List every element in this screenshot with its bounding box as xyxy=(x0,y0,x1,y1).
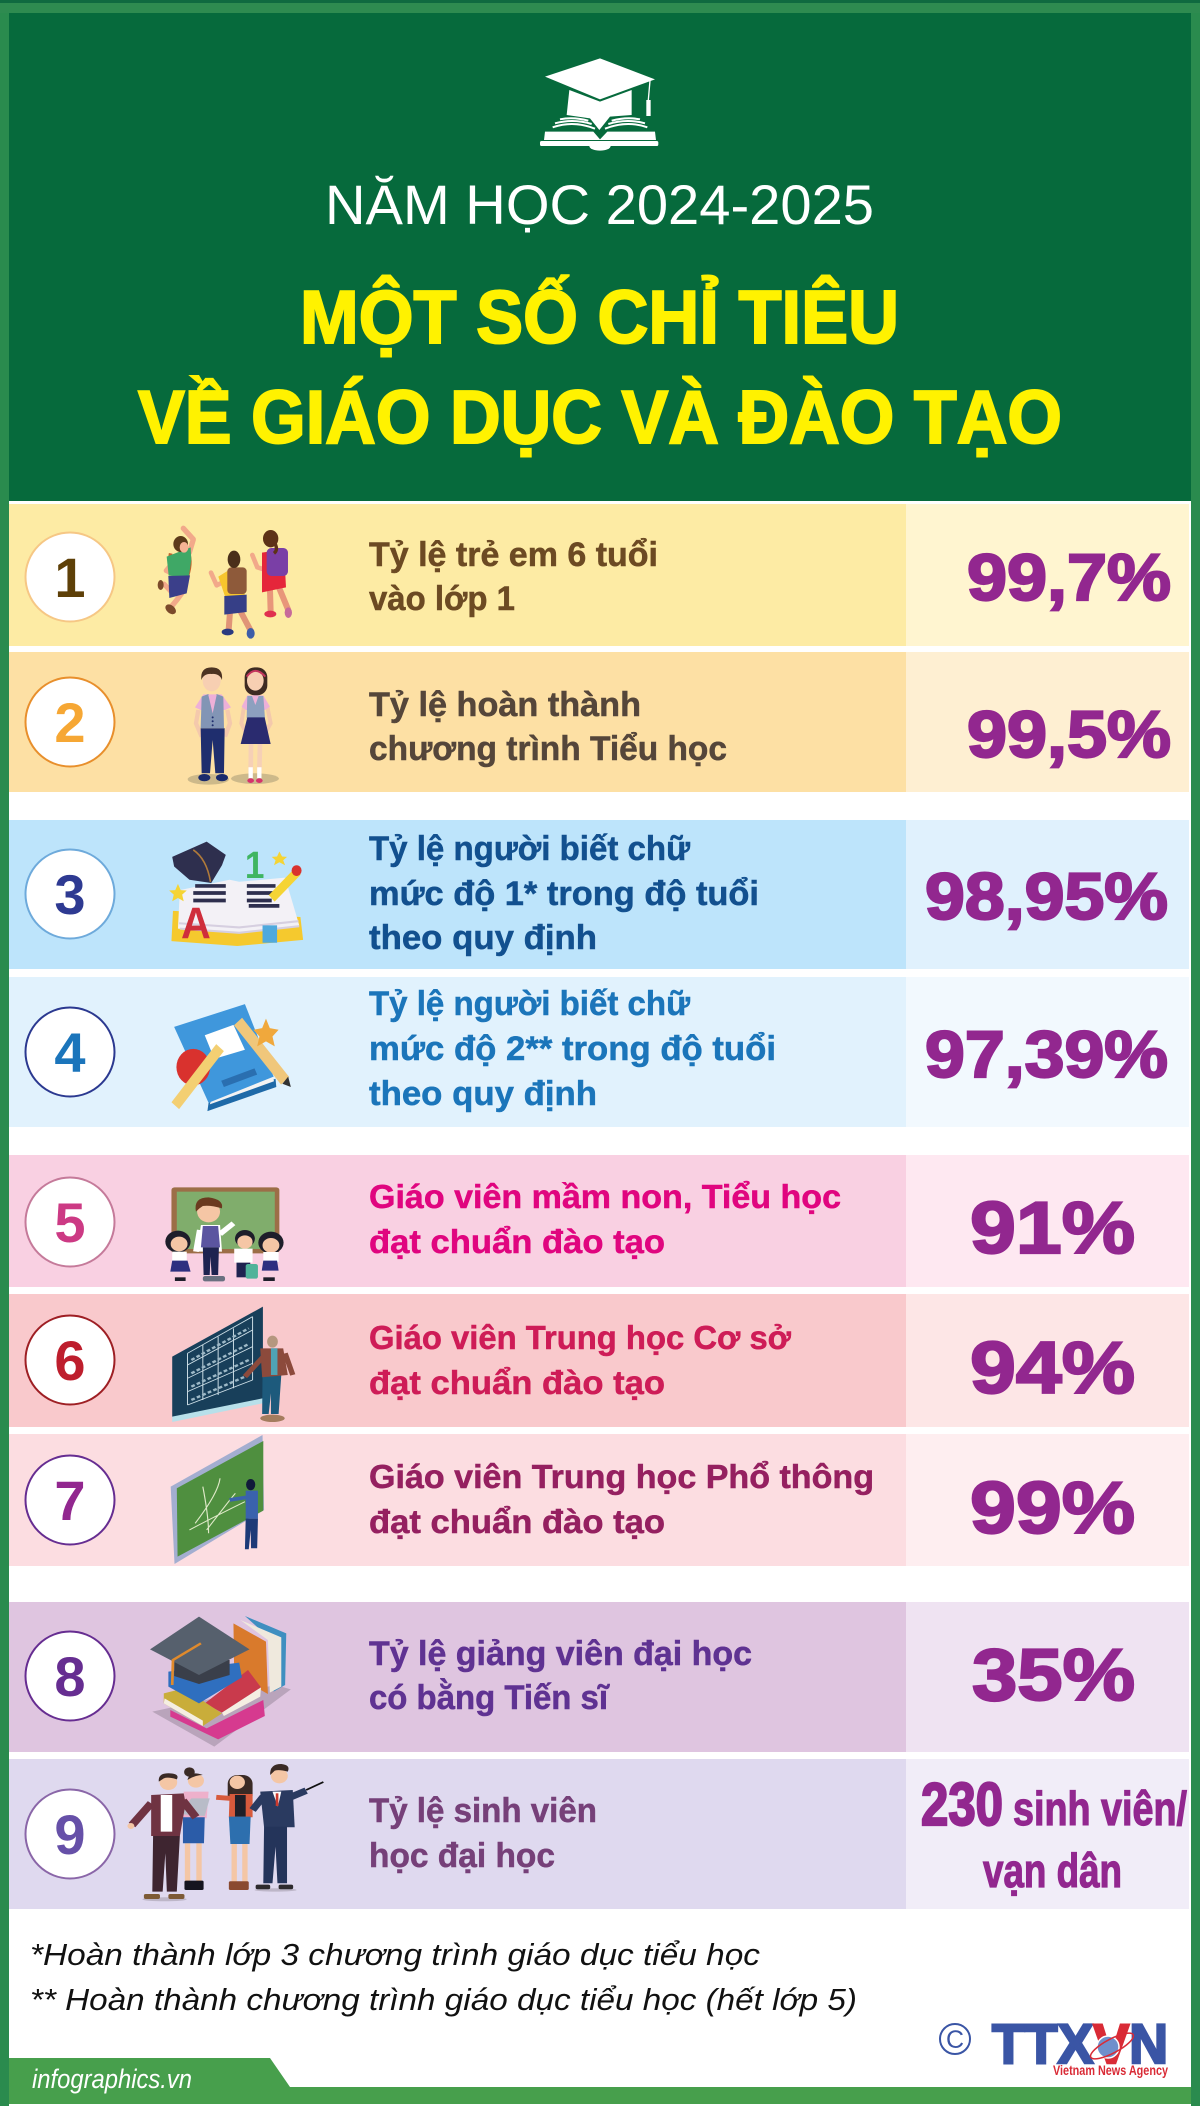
icon: group of four lecturers xyxy=(127,1764,323,1901)
label 9 xyxy=(369,1792,597,1875)
footer bar xyxy=(9,2058,1191,2104)
row 7 xyxy=(9,1434,1189,1566)
icon: teacher at dark formula board xyxy=(172,1307,293,1422)
row 9 xyxy=(9,1759,1189,1909)
value 6: 94% xyxy=(970,1328,1135,1409)
label 5: đạt chuẩn đào tạo xyxy=(369,1223,665,1260)
value 7: 99% xyxy=(970,1468,1135,1549)
label 1: vào lớp 1 xyxy=(369,580,515,618)
title xyxy=(138,275,1062,459)
label 3: mức độ 1* trong độ tuổi xyxy=(369,875,759,913)
value 9: vạn dân xyxy=(983,1844,1122,1897)
number 5 xyxy=(26,1178,114,1266)
copyright mark and TTXVN logo: Vietnam News Agency xyxy=(1053,2062,1168,2078)
row 8 xyxy=(9,1602,1189,1752)
label 7: Giáo viên Trung học Phổ thông xyxy=(369,1458,874,1495)
icon: open book with cap and pencil: 1 xyxy=(245,844,265,886)
label 2: Tỷ lệ hoàn thành xyxy=(369,686,641,724)
number 9 xyxy=(26,1790,114,1878)
label 3: theo quy định xyxy=(369,919,597,957)
row 5 xyxy=(9,1155,1189,1287)
value 3: 98,95% xyxy=(925,859,1168,933)
number 8 xyxy=(26,1632,114,1720)
number 2 xyxy=(26,678,114,766)
label 8: Tỷ lệ giảng viên đại học xyxy=(369,1635,752,1673)
row 3 xyxy=(9,820,1189,969)
icon: teacher at green board xyxy=(171,1435,264,1564)
label 4: mức độ 2** trong độ tuổi xyxy=(369,1030,776,1068)
label 8: có bằng Tiến sĩ xyxy=(369,1679,610,1717)
label 2 xyxy=(369,686,727,768)
value 1: 99,7% xyxy=(967,540,1171,614)
number 4: 4 xyxy=(54,1021,86,1084)
value 8: 35% xyxy=(972,1635,1135,1716)
number 3 xyxy=(26,850,114,938)
number 5: 5 xyxy=(54,1191,86,1254)
label 4 xyxy=(369,985,776,1113)
label 9: Tỷ lệ sinh viên xyxy=(369,1792,597,1830)
label 4: theo quy định xyxy=(369,1075,597,1113)
subtitle: NĂM HỌC 2024-2025 xyxy=(325,173,874,236)
icon: notebook with apple and pencil xyxy=(174,1004,291,1111)
copyright mark and TTXVN logo: TTXVN xyxy=(992,2012,1168,2075)
icon: teacher and pupils at blackboard xyxy=(165,1187,284,1281)
site name: infographics.vn xyxy=(32,2064,192,2094)
title: MỘT SỐ CHỈ TIÊU xyxy=(300,275,899,359)
value 4: 97,39% xyxy=(925,1017,1168,1091)
label 7 xyxy=(369,1458,874,1540)
label 6: Giáo viên Trung học Cơ sở xyxy=(369,1319,792,1356)
number 1 xyxy=(26,532,114,622)
copyright mark and TTXVN logo: C xyxy=(946,2026,964,2054)
value 9 xyxy=(921,1771,1187,1897)
row 1 xyxy=(9,504,1189,646)
icon: cap and stack of books xyxy=(150,1616,291,1747)
row 4 xyxy=(9,977,1189,1127)
number 1: 1 xyxy=(54,546,86,609)
header panel xyxy=(9,13,1191,501)
row 6 xyxy=(9,1294,1189,1427)
number 6: 6 xyxy=(54,1329,86,1392)
footnotes xyxy=(30,1937,857,2017)
label 3 xyxy=(369,830,759,957)
row 2 xyxy=(9,652,1189,792)
icon: open book with cap and pencil: A xyxy=(181,899,211,949)
number 4 xyxy=(26,1008,114,1096)
number 3: 3 xyxy=(54,863,86,926)
icon: graduation cap on book xyxy=(540,58,658,151)
label 6 xyxy=(369,1319,792,1401)
number 7 xyxy=(26,1456,114,1544)
label 9: học đại học xyxy=(369,1837,555,1875)
icon: children with backpacks xyxy=(158,528,292,639)
label 7: đạt chuẩn đào tạo xyxy=(369,1503,665,1540)
label 5: Giáo viên mầm non, Tiểu học xyxy=(369,1178,841,1215)
label 3: Tỷ lệ người biết chữ xyxy=(369,830,690,868)
footnotes: ** Hoàn thành chương trình giáo dục tiểu học (hết lớp 5) xyxy=(30,1982,857,2017)
value 5: 91% xyxy=(970,1188,1135,1269)
icon: open book with cap and pencil xyxy=(169,842,303,949)
label 1: Tỷ lệ trẻ em 6 tuổi xyxy=(369,536,658,574)
label 1 xyxy=(369,536,658,618)
number 6 xyxy=(26,1316,114,1404)
label 2: chương trình Tiểu học xyxy=(369,730,727,768)
number 2: 2 xyxy=(54,691,86,754)
label 4: Tỷ lệ người biết chữ xyxy=(369,985,690,1023)
number 7: 7 xyxy=(54,1469,86,1532)
number 9: 9 xyxy=(54,1803,86,1866)
title: VỀ GIÁO DỤC VÀ ĐÀO TẠO xyxy=(138,375,1062,459)
value 9: 230 xyxy=(921,1771,1003,1838)
label 5 xyxy=(369,1178,841,1260)
footnotes: *Hoàn thành lớp 3 chương trình giáo dục tiểu học xyxy=(30,1937,761,1972)
label 8 xyxy=(369,1635,752,1717)
icon: two pupils in uniform xyxy=(188,667,279,785)
label 6: đạt chuẩn đào tạo xyxy=(369,1364,665,1401)
number 8: 8 xyxy=(54,1645,86,1708)
value 2: 99,5% xyxy=(967,697,1171,771)
